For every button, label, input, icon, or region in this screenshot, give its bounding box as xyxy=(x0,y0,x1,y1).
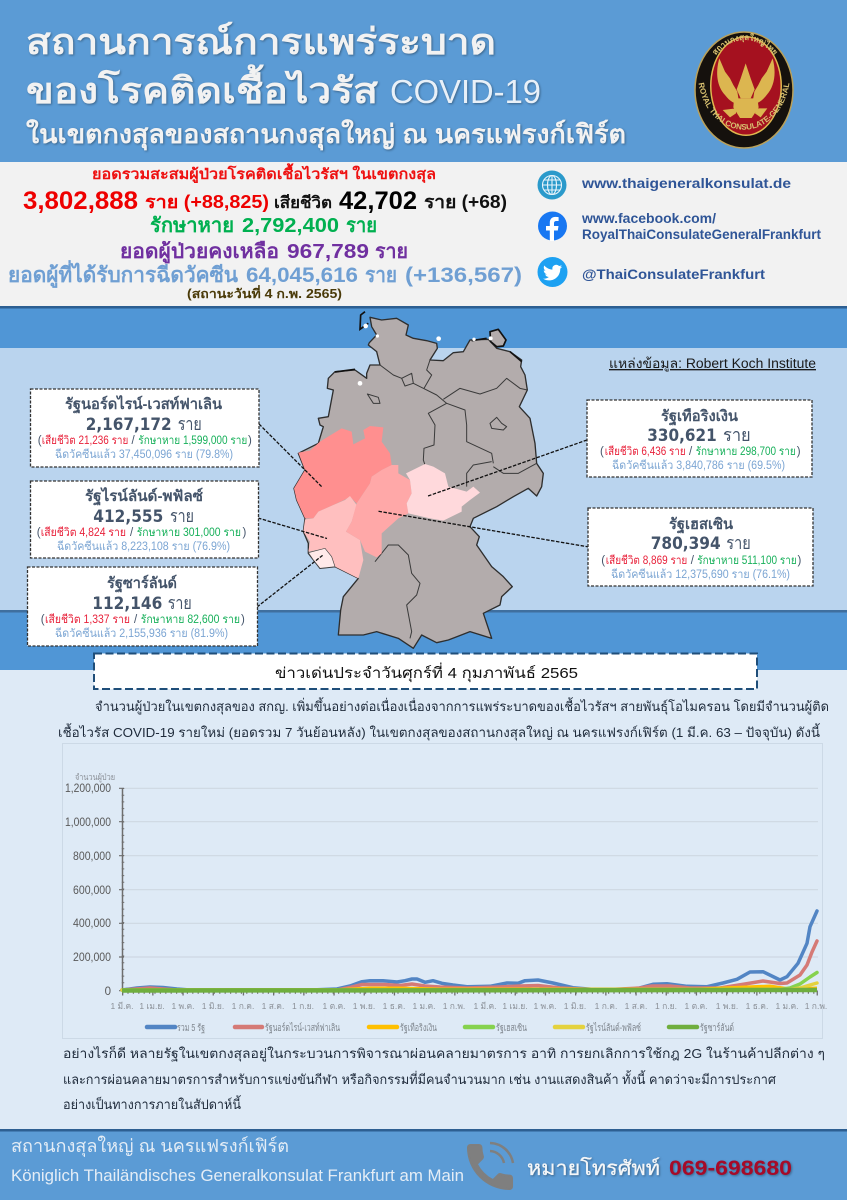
callout: Saarland xyxy=(28,567,258,646)
vaccinations: ฉีดวัคซีนแล้ว 12,375,690 ราย (76.1%) xyxy=(611,568,790,581)
panel: header band xyxy=(0,0,847,162)
deaths label: เสียชีวิต xyxy=(274,193,332,212)
y axis labels xyxy=(65,783,111,998)
vaccinated: ราย xyxy=(365,264,397,287)
deaths and recoveries: รักษาหาย 298,700 ราย xyxy=(696,446,796,458)
case count: 112,146 xyxy=(92,594,162,614)
legend: รัฐซาร์ลันด์ xyxy=(700,1022,734,1034)
y axis labels: 0 xyxy=(105,986,111,998)
remaining patients: ยอดผู้ป่วยคงเหลือ xyxy=(120,240,279,265)
y axis title: จำนวนผู้ป่วย xyxy=(75,772,115,783)
intro paragraph xyxy=(58,697,829,741)
icon: globe xyxy=(538,170,566,200)
x axis labels: 1 มิ.ย. xyxy=(564,1001,586,1011)
deaths and recoveries: ( xyxy=(38,435,42,447)
icon: consulate seal: สถานกงสุลใหญ่ไทย xyxy=(713,33,778,55)
deaths and recoveries: ) xyxy=(242,527,246,539)
deaths and recoveries: เสียชีวิต 21,236 ราย xyxy=(42,434,128,447)
case unit: ราย xyxy=(170,506,194,526)
state: Thuringia xyxy=(406,464,480,521)
news heading box: ข่าวเด่นประจำวันศุกร์ที่ 4 กุมภาพันธ์ 2565 xyxy=(275,662,578,683)
legend: รัฐเฮสเซิน xyxy=(496,1023,527,1034)
state: Saarland xyxy=(308,548,335,568)
x axis labels: 1 ส.ค. xyxy=(262,1001,284,1011)
recovered: รักษาหาย xyxy=(150,215,234,237)
phone number: 069-698680 xyxy=(669,1157,792,1180)
x axis labels: 1 พ.ค. xyxy=(171,1001,195,1011)
y axis labels: 1,000,000 xyxy=(65,817,111,829)
remaining patients: ราย xyxy=(375,241,408,263)
twitter handle: @ThaiConsulateFrankfurt xyxy=(582,266,765,282)
x axis labels: 1 ม.ค. xyxy=(412,1001,436,1011)
state name: รัฐเทือริงเงิน xyxy=(661,407,739,426)
data source: แหล่งข้อมูล: Robert Koch Institute xyxy=(609,356,816,372)
intro paragraph: เชื้อไวรัส COVID-19 รายใหม่ (ยอดรวม 7 วันย้อนหลัง) ในเขตกงสุลของสถานกงสุลใหญ่ ณ นครแฟรงก์เฟิร์ต (1 มี.ค. 63 – ปัจจุบัน) ดังนี้ xyxy=(58,723,821,741)
case unit: ราย xyxy=(723,425,751,445)
island: Ruegen xyxy=(490,329,506,347)
vaccinated: (+136,567) xyxy=(405,264,522,287)
icon: consulate seal: ROYAL THAI CONSULATE-GENERAL xyxy=(698,82,790,130)
closing paragraph: และการผ่อนคลายมาตรการสำหรับการแข่งขันกีฬา หรือกิจกรรมที่มีคนจำนวนมาก เช่น งานแสดงสินค้า ทั้งนี้ คาดว่าจะมีการประกาศ xyxy=(63,1070,777,1087)
x axis labels: 1 ก.พ. xyxy=(805,1001,827,1011)
state name: รัฐไรน์ลันด์-พฟัลซ์ xyxy=(85,486,203,506)
y axis labels: 1,200,000 xyxy=(65,783,111,795)
x axis labels: 1 มี.ค. xyxy=(110,1001,134,1011)
total cases: 3,802,888 xyxy=(23,187,138,215)
y axis labels: 600,000 xyxy=(73,885,111,897)
deaths and recoveries xyxy=(38,434,252,447)
x axis labels: 1 ก.ค. xyxy=(595,1001,617,1011)
legend: รัฐไรน์ลันด์-พฟัลซ์ xyxy=(586,1022,641,1034)
consulate name in German: Königlich Thailändisches Generalkonsulat Frankfurt am Main xyxy=(11,1166,464,1185)
panel: summary figures xyxy=(0,162,847,306)
deaths and recoveries: / xyxy=(130,527,134,539)
leader lines xyxy=(257,424,589,607)
coast details xyxy=(335,312,522,386)
deaths and recoveries: / xyxy=(691,555,695,567)
line chart: new cases xyxy=(62,744,827,1038)
intro paragraph: จำนวนผู้ป่วยในเขตกงสุลของ สกญ. เพิ่มขึ้นอย่างต่อเนื่องเนื่องจากการแพร่ระบาดของเชื้อไวรัสฯ สายพันธุ์โอไมครอน โดยมีจำนวนผู้ติด xyxy=(95,697,829,715)
icon: consulate seal xyxy=(694,31,794,149)
deaths and recoveries xyxy=(601,554,802,567)
deaths and recoveries: ( xyxy=(41,614,45,626)
state: Hesse xyxy=(346,465,412,557)
facebook link: www.facebook.com/ xyxy=(581,211,716,226)
title COVID-19: COVID-19 xyxy=(390,73,541,110)
deaths and recoveries: เสียชีวิต 6,436 ราย xyxy=(605,445,686,458)
vaccinations: ฉีดวัคซีนแล้ว 8,223,108 ราย (76.9%) xyxy=(57,540,230,553)
callout: Rhineland-Palatinate xyxy=(30,481,258,558)
legend: รวม 5 รัฐ xyxy=(177,1023,205,1034)
callout: North Rhine-Westphalia xyxy=(30,389,259,467)
subtitle: ในเขตกงสุลของสถานกงสุลใหญ่ ณ นครแฟรงก์เฟิร์ต xyxy=(26,119,626,151)
x axis labels: 1 มี.ค. xyxy=(473,1001,497,1011)
news heading box xyxy=(94,654,757,689)
deaths and recoveries xyxy=(600,445,801,458)
remaining patients: 967,789 xyxy=(287,241,369,263)
case unit: ราย xyxy=(178,414,202,434)
y axis labels: 200,000 xyxy=(73,952,111,964)
deaths and recoveries xyxy=(41,613,245,626)
deaths and recoveries: รักษาหาย 1,599,000 ราย xyxy=(138,435,247,447)
case unit: ราย xyxy=(168,593,192,613)
state name: รัฐซาร์ลันด์ xyxy=(107,574,177,593)
deaths and recoveries: / xyxy=(132,435,136,447)
case count: 330,621 xyxy=(647,426,717,446)
title line 2: ของโรคติดเชื้อไวรัส xyxy=(26,64,378,111)
closing paragraph xyxy=(63,1044,825,1112)
closing paragraph: อย่างเป็นทางการภายในสัปดาห์นี้ xyxy=(63,1095,242,1112)
remaining patients xyxy=(120,240,408,265)
case count: 780,394 xyxy=(651,534,721,554)
x axis labels: 1 พ.ย. xyxy=(353,1001,375,1011)
x axis labels: 1 ธ.ค. xyxy=(746,1001,768,1011)
icon: telephone xyxy=(468,1143,513,1189)
state name: รัฐเฮสเซิน xyxy=(669,515,734,534)
x axis labels: 1 ม.ค. xyxy=(775,1001,799,1011)
state: North Rhine-Westphalia xyxy=(294,426,392,518)
callout: Thuringia xyxy=(587,400,812,477)
legend: รัฐเทือริงเงิน xyxy=(400,1022,437,1034)
phone label: หมายโทรศัพท์ xyxy=(527,1157,660,1180)
recovered: 2,792,400 xyxy=(242,215,339,237)
deaths and recoveries: ) xyxy=(248,435,252,447)
deaths and recoveries: ( xyxy=(37,527,41,539)
deaths and recoveries: รักษาหาย 511,100 ราย xyxy=(697,555,797,567)
deaths and recoveries: รักษาหาย 82,600 ราย xyxy=(141,614,240,626)
panel: news section background xyxy=(0,670,847,1129)
x axis labels: 1 มิ.ย. xyxy=(202,1001,224,1011)
deaths and recoveries: ( xyxy=(600,446,604,458)
status date: (สถานะวันที่ 4 ก.พ. 2565) xyxy=(187,285,342,301)
x axis labels: 1 ส.ค. xyxy=(625,1001,647,1011)
vaccinated: ยอดผู้ที่ได้รับการฉีดวัคซีน xyxy=(8,259,239,289)
series: Thuringia xyxy=(122,986,817,990)
deaths and recoveries: ) xyxy=(797,446,801,458)
recovered: ราย xyxy=(346,215,377,237)
deaths and recoveries: ( xyxy=(601,555,605,567)
deaths and recoveries: / xyxy=(134,614,138,626)
x axis labels: 1 ธ.ค. xyxy=(383,1001,405,1011)
series: North Rhine-Westphalia xyxy=(122,941,817,990)
consulate name in Thai: สถานกงสุลใหญ่ ณ นครแฟรงก์เฟิร์ต xyxy=(11,1135,289,1157)
series: Hesse xyxy=(122,972,817,990)
deaths and recoveries: ) xyxy=(798,555,802,567)
new cases: ราย (+88,825) xyxy=(145,192,269,212)
x axis labels: 1 พ.ค. xyxy=(533,1001,557,1011)
vaccinations: ฉีดวัคซีนแล้ว 37,450,096 ราย (79.8%) xyxy=(55,448,233,461)
state borders xyxy=(367,360,537,638)
legend xyxy=(147,1022,734,1034)
legend: รัฐนอร์ดไรน์-เวสท์ฟาเลิน xyxy=(265,1022,340,1034)
x axis labels: 1 พ.ย. xyxy=(716,1001,738,1011)
deaths and recoveries: เสียชีวิต 4,824 ราย xyxy=(41,526,126,539)
deaths and recoveries xyxy=(37,526,247,539)
deaths and recoveries: ) xyxy=(241,614,245,626)
state: Rhineland-Palatinate xyxy=(303,496,363,578)
x axis labels: 1 เม.ย. xyxy=(502,1001,528,1011)
deaths and recoveries: รักษาหาย 301,000 ราย xyxy=(137,527,241,539)
vaccinated: 64,045,616 xyxy=(246,264,358,287)
national outline xyxy=(294,317,543,648)
vaccinated xyxy=(8,259,522,289)
x axis labels xyxy=(110,1001,827,1011)
icon: facebook xyxy=(538,212,567,241)
title line 1: สถานการณ์การแพร่ระบาด xyxy=(26,21,496,62)
deaths and recoveries: เสียชีวิต 1,337 ราย xyxy=(45,613,130,626)
state name: รัฐนอร์ดไรน์-เวสท์ฟาเลิน xyxy=(65,394,223,414)
website link: www.thaigeneralkonsulat.de xyxy=(581,175,791,191)
x axis labels: 1 ต.ค. xyxy=(322,1001,346,1011)
icon: twitter xyxy=(538,257,568,287)
x axis labels: 1 ก.ย. xyxy=(655,1001,677,1011)
series: total five states xyxy=(122,911,817,990)
facebook link xyxy=(581,211,821,242)
series: Saarland xyxy=(122,988,817,993)
panel: map band xyxy=(0,306,847,670)
new deaths: ราย (+68) xyxy=(424,192,507,212)
x axis labels: 1 ก.ย. xyxy=(292,1001,314,1011)
deaths and recoveries: / xyxy=(689,446,693,458)
x axis labels: 1 ก.ค. xyxy=(232,1001,254,1011)
deaths and recoveries: เสียชีวิต 8,869 ราย xyxy=(606,554,687,567)
y axis labels: 400,000 xyxy=(73,918,111,930)
x axis labels: 1 ก.พ. xyxy=(443,1001,465,1011)
axes xyxy=(119,788,818,993)
x axis labels: 1 เม.ย. xyxy=(139,1001,165,1011)
cumulative heading: ยอดรวมสะสมผู้ป่วยโรคติดเชื้อไวรัสฯ ในเขตกงสุล xyxy=(92,163,436,183)
series: Rhineland-Palatinate xyxy=(122,983,817,990)
panel: footer xyxy=(0,1129,847,1200)
case count: 2,167,172 xyxy=(86,415,172,435)
case unit: ราย xyxy=(726,533,751,553)
map of Germany xyxy=(294,312,543,648)
x axis labels: 1 ต.ค. xyxy=(684,1001,708,1011)
callout: Hesse xyxy=(588,508,813,586)
vaccinations: ฉีดวัคซีนแล้ว 3,840,786 ราย (69.5%) xyxy=(612,459,785,472)
vaccinations: ฉีดวัคซีนแล้ว 2,155,936 ราย (81.9%) xyxy=(55,627,228,640)
deaths number: 42,702 xyxy=(339,187,417,215)
recovered xyxy=(150,215,377,237)
case count: 412,555 xyxy=(93,507,163,527)
facebook link: RoyalThaiConsulateGeneralFrankfurt xyxy=(582,227,821,242)
y axis labels: 800,000 xyxy=(73,851,111,863)
closing paragraph: อย่างไรก็ดี หลายรัฐในเขตกงสุลอยู่ในกระบวนการพิจารณาผ่อนคลายมาตรการ อาทิ การยกเลิกการใช้กฎ 2G ในร้านค้าปลีกต่าง ๆ xyxy=(63,1044,825,1062)
